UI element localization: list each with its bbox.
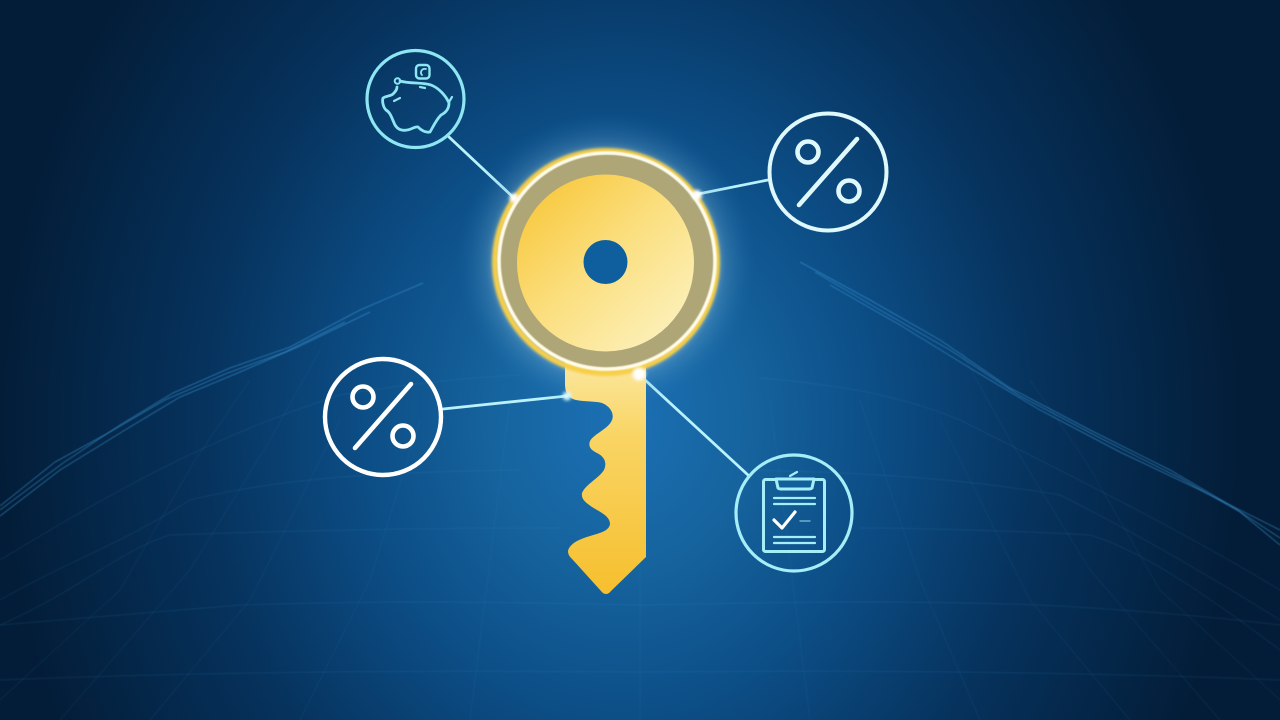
right ridge: [800, 262, 1280, 545]
connection nodes: [510, 190, 702, 400]
key head white highlight ring: [499, 153, 715, 369]
node: piggy bank: [510, 194, 518, 202]
icon: piggy bank: [367, 50, 464, 148]
icon: upper percent: [770, 114, 886, 230]
horizontal mesh lines: [0, 375, 1280, 680]
key head gold disk: [517, 174, 694, 352]
key glow: [456, 112, 756, 412]
wireframe mesh terrain: [0, 262, 1280, 720]
key: [495, 151, 717, 594]
left ridge: [0, 283, 423, 516]
key shaft with teeth: [565, 360, 646, 594]
connector lines: [443, 137, 768, 475]
icon: lower percent: [325, 359, 441, 475]
connector: clipboard to key: [644, 379, 748, 475]
node: clipboard: [632, 368, 646, 380]
connector: piggy bank to key: [449, 137, 514, 198]
key head gray ring: [499, 155, 713, 369]
icon: clipboard checklist: [736, 455, 852, 571]
node: lower percent: [562, 392, 572, 400]
key head hole: [584, 240, 628, 284]
connector: lower percent to key: [443, 396, 567, 409]
node: upper percent: [692, 190, 702, 200]
radial mesh lines: [0, 350, 1280, 720]
key head outer yellow ring: [495, 151, 717, 373]
connector: upper percent to key: [698, 180, 768, 194]
